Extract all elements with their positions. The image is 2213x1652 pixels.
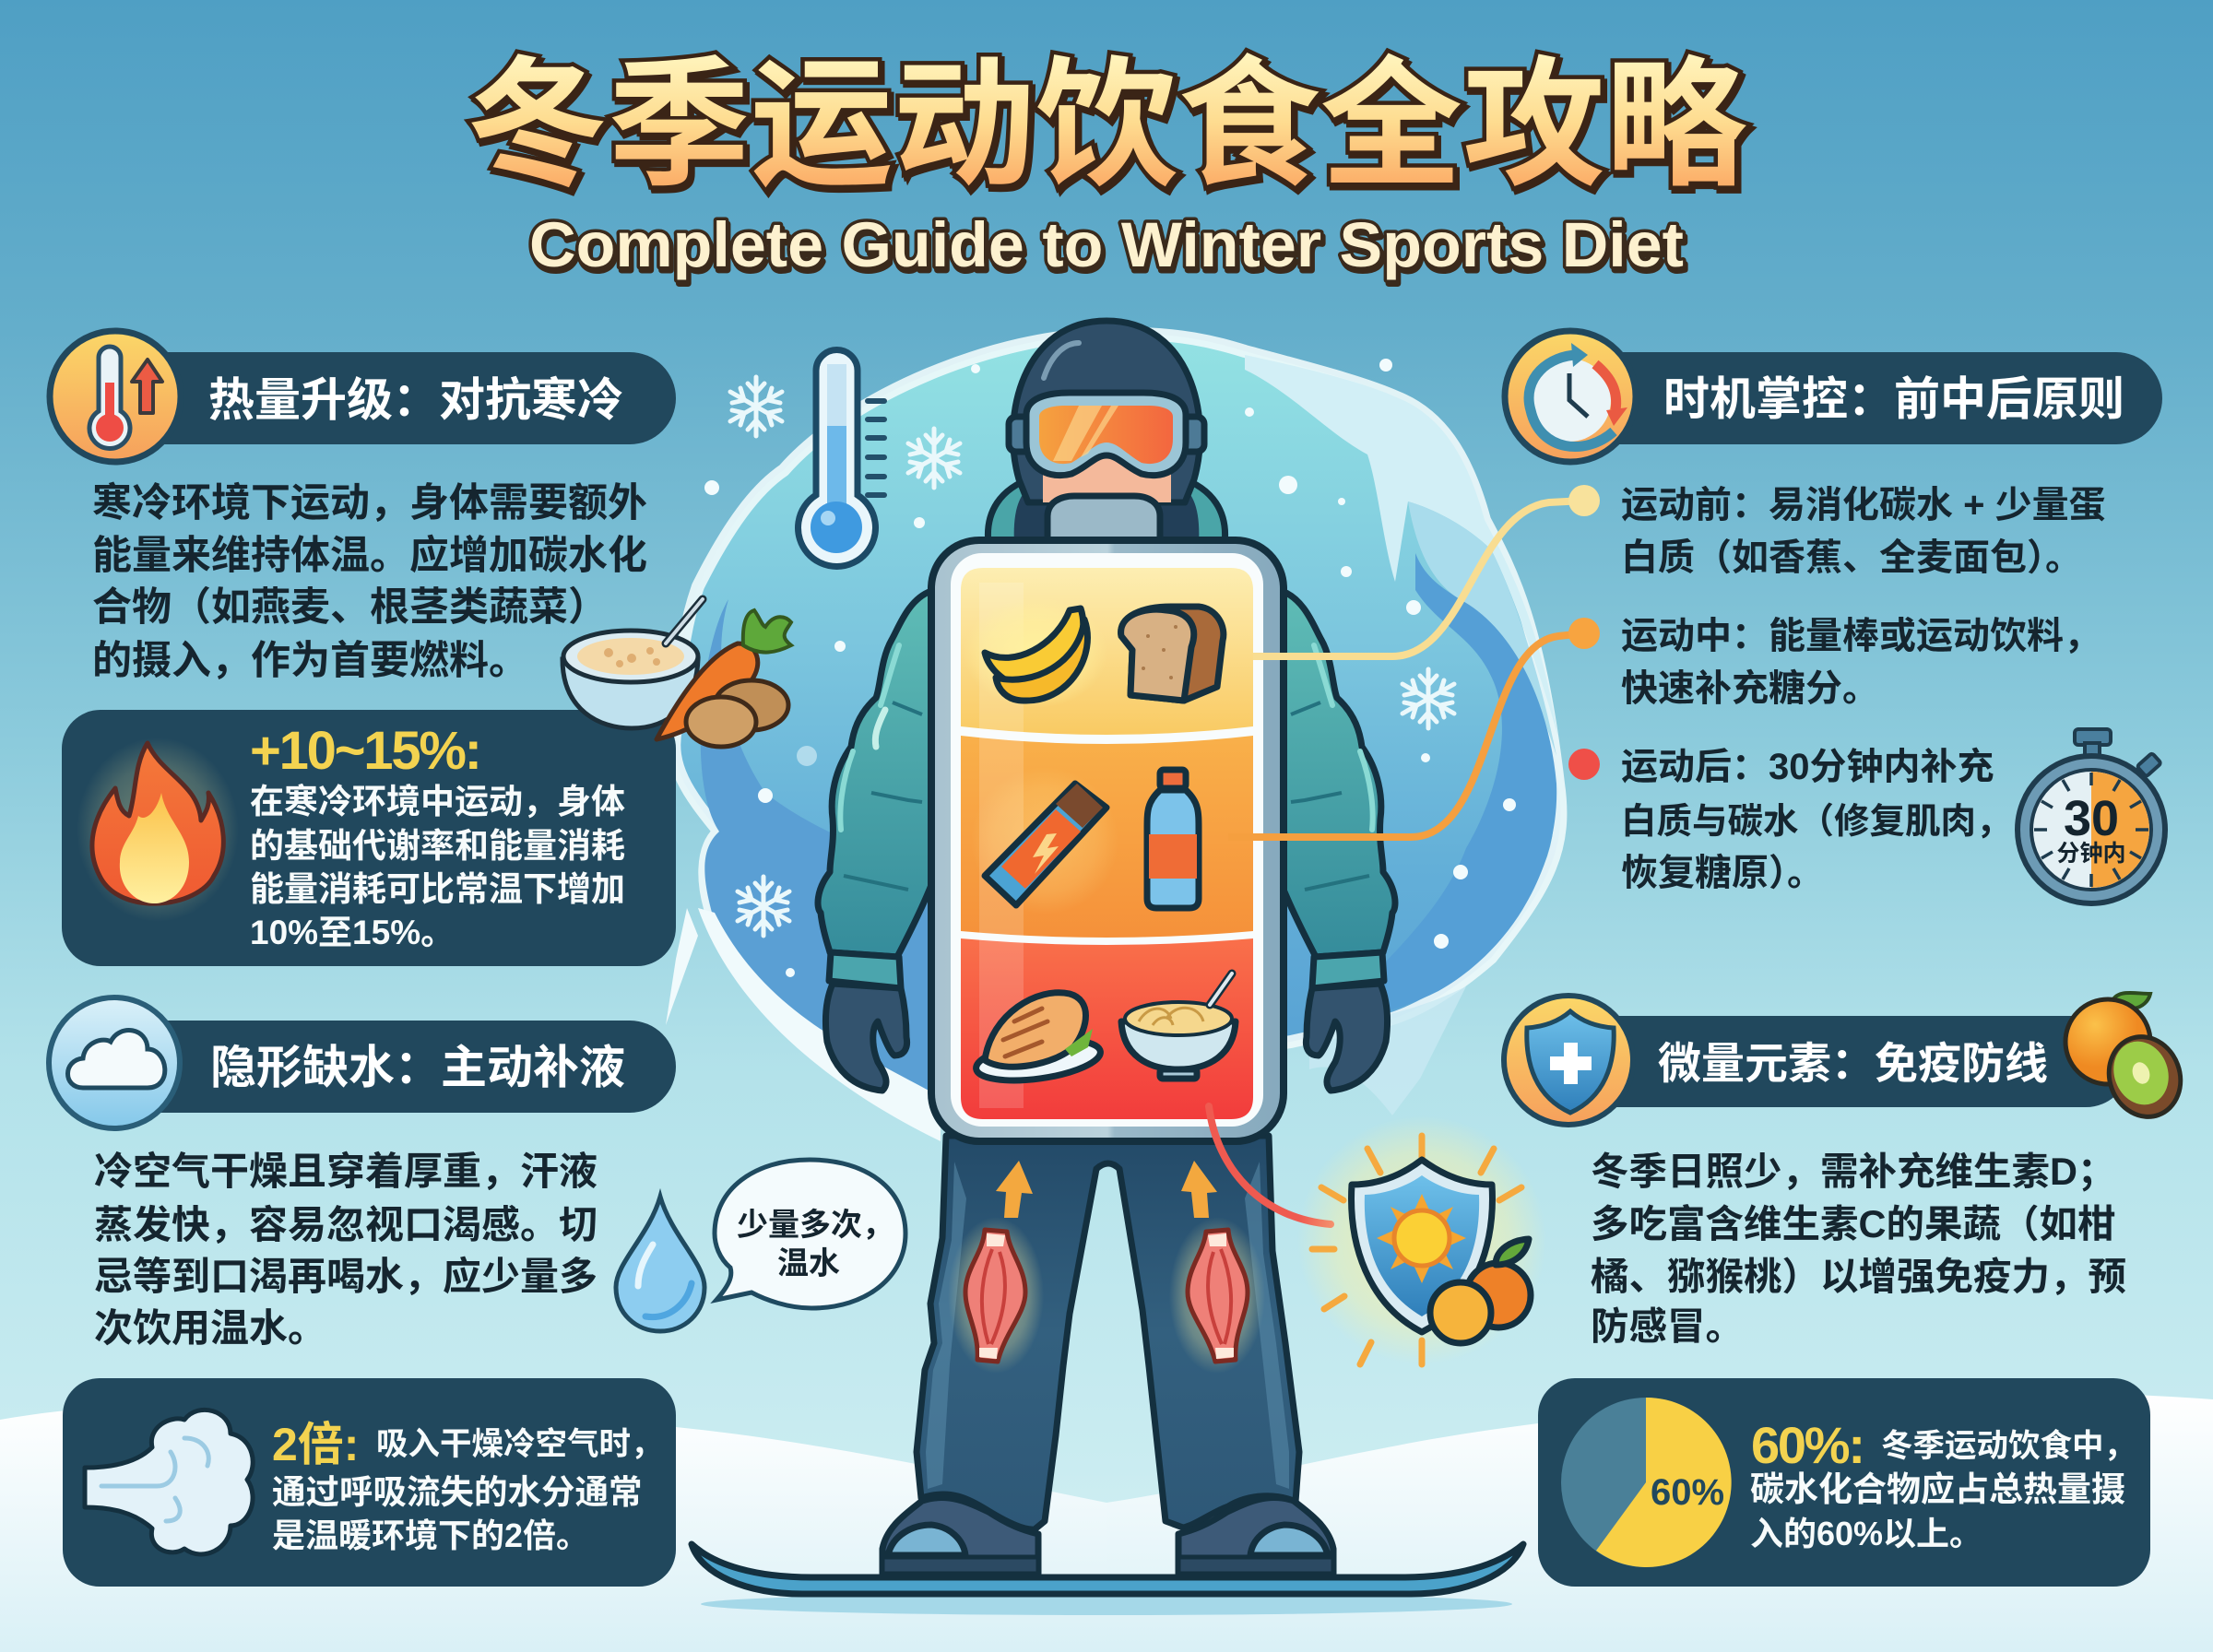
food: sports drink <box>1147 770 1199 908</box>
stat text <box>250 783 625 951</box>
panel: micronutrients <box>1504 993 2192 1587</box>
pie chart 60% <box>1561 1398 1732 1567</box>
body text: 橘、猕猴桃）以增强免疫力，预 <box>1591 1255 2126 1298</box>
left boot <box>882 1498 1038 1574</box>
icon: 30-minute stopwatch: 分钟内 <box>2056 841 2126 867</box>
stat number: 2倍: <box>272 1419 359 1470</box>
vitamin D shield <box>1297 1115 1546 1364</box>
icon: orange and kiwi <box>2065 993 2192 1127</box>
helmet highlight <box>1044 343 1079 378</box>
header pill <box>115 352 676 444</box>
icon: water drop <box>616 1197 704 1331</box>
connector: during-workout line <box>1228 633 1584 837</box>
icon: clock with arrows <box>1505 331 1636 462</box>
neck cap <box>1047 496 1160 546</box>
skier figure <box>692 321 1523 1615</box>
icon: medical shield <box>1504 996 1633 1125</box>
stat box <box>63 1378 676 1587</box>
stat text <box>1750 1429 2136 1552</box>
battery body <box>931 540 1284 1141</box>
pale blue ice below rim <box>1408 502 1556 756</box>
stat text: 是温暖环境下的2倍。 <box>272 1516 589 1554</box>
body text <box>94 1150 598 1350</box>
jacket collar <box>988 478 1225 544</box>
snowboard shadow <box>701 1593 1512 1615</box>
connector: pre-workout line <box>1253 501 1584 656</box>
stat number: 60%: <box>1751 1416 1865 1474</box>
body text: 防感冒。 <box>1591 1304 1744 1348</box>
text: after workout: 白质与碳水（修复肌肉， <box>1621 802 2012 842</box>
right muscle <box>1169 1217 1265 1374</box>
floating snow dots <box>704 359 1516 977</box>
body text: 合物（如燕麦、根茎类蔬菜） <box>92 585 608 630</box>
right arm <box>1282 591 1395 957</box>
icon: 30-minute stopwatch <box>2018 729 2165 903</box>
dot: pre-workout <box>1568 485 1600 516</box>
right up arrow <box>1181 1161 1217 1218</box>
right glove <box>1306 984 1388 1091</box>
ice rim upper right <box>1245 355 1558 738</box>
ice globe backdrop <box>666 334 1560 1141</box>
ice lower right <box>1309 986 1466 1115</box>
food: bread <box>1121 607 1224 701</box>
helmet <box>1013 321 1200 502</box>
stat text: 能量消耗可比常温下增加 <box>250 870 625 908</box>
snowboard <box>692 1544 1523 1594</box>
left muscle <box>948 1217 1044 1374</box>
icon: breath cloud <box>85 1410 253 1554</box>
text: during workout: 运动中：能量棒或运动饮料， <box>1621 616 2101 656</box>
icon: cloud <box>49 997 180 1128</box>
body text: 冬季日照少，需补充维生素D； <box>1591 1150 2115 1193</box>
stat text: 入的60%以上。 <box>1750 1515 1982 1552</box>
body text: 蒸发快，容易忽视口渴感。切 <box>94 1203 598 1246</box>
speech bubble: 温水 <box>777 1246 840 1281</box>
header pill <box>114 1021 676 1113</box>
dot: during workout <box>1568 618 1600 649</box>
body text <box>1591 1150 2126 1348</box>
right cuff <box>1312 952 1384 988</box>
title <box>466 47 1747 280</box>
stat text: 碳水化合物应占总热量摄 <box>1750 1470 2125 1508</box>
darker blue crescent right <box>1328 553 1556 1023</box>
left up arrow <box>996 1161 1033 1218</box>
speech bubble: 少量多次， <box>737 1208 893 1243</box>
stat text: 通过呼吸流失的水分通常 <box>272 1473 642 1511</box>
snowflakes <box>730 377 1454 936</box>
icon: oats, carrot and potatoes <box>562 599 791 747</box>
text: during workout <box>1621 616 2101 709</box>
food: noodle bowl <box>1121 974 1236 1079</box>
food: energy bar <box>971 767 1118 914</box>
stat box <box>1538 1378 2150 1587</box>
body text: 冷空气干燥且穿着厚重，汗液 <box>94 1150 598 1193</box>
panel: calories <box>50 331 676 966</box>
heading: 微量元素：免疫防线 <box>1658 1039 2048 1088</box>
left icicle <box>666 908 698 1025</box>
stat number: +10~15%: <box>250 721 482 781</box>
speech bubble <box>715 1160 905 1308</box>
body text: 多吃富含维生素C的果蔬（如柑 <box>1591 1202 2115 1245</box>
stat text <box>272 1427 662 1554</box>
header pill <box>1568 1016 2130 1107</box>
stat text: 的基础代谢率和能量消耗 <box>250 827 625 865</box>
text: pre-workout: 白质（如香蕉、全麦面包）。 <box>1621 537 2082 578</box>
food: banana <box>964 597 1107 708</box>
text: after workout <box>1621 747 2012 893</box>
right boot <box>1178 1498 1333 1574</box>
body text: 忌等到口渴再喝水，应少量多 <box>94 1255 598 1298</box>
header pill <box>1570 352 2162 444</box>
left glove <box>825 984 907 1091</box>
cold thermometer <box>798 350 884 566</box>
white ice band lower left <box>698 908 941 1141</box>
stat text: 10%至15%。 <box>250 914 455 951</box>
inner neck <box>1014 484 1199 544</box>
battery gloss <box>979 583 1024 1108</box>
panel: hydration <box>49 997 905 1587</box>
stat box <box>62 710 676 966</box>
battery casing <box>931 540 1284 1141</box>
body text: 次饮用温水。 <box>94 1306 326 1350</box>
segment: during workout <box>961 736 1253 938</box>
battery inner frame <box>951 553 1263 1127</box>
food: grilled chicken <box>974 993 1103 1087</box>
goggles <box>1009 393 1204 476</box>
text: after workout: 运动后：30分钟内补充 <box>1621 747 1994 787</box>
legs <box>917 1136 1299 1529</box>
left cuff <box>829 952 901 988</box>
text: after workout: 恢复糖原）。 <box>1621 853 1824 893</box>
dot: after workout <box>1568 749 1600 780</box>
pie chart 60%: 60% <box>1651 1472 1724 1513</box>
panel: timing <box>1505 331 2165 903</box>
segment: post-workout <box>961 938 1253 1119</box>
stat text: 吸入干燥冷空气时， <box>376 1427 662 1462</box>
icon: flame <box>77 738 239 922</box>
icon: 30-minute stopwatch: 30 <box>2064 791 2119 846</box>
connector: red line to vitamin shield <box>1209 1106 1331 1224</box>
main Chinese title: 冬季运动饮食全攻略 <box>466 47 1747 204</box>
trouser highlight left <box>926 1162 966 1489</box>
heading: 热量升级：对抗寒冷 <box>208 374 623 426</box>
body text: 能量来维持体温。应增加碳水化 <box>92 534 647 578</box>
left arm <box>818 591 931 957</box>
text: pre-workout: 运动前：易消化碳水 + 少量蛋 <box>1621 485 2106 525</box>
globe body <box>674 334 1560 1097</box>
heading: 隐形缺水：主动补液 <box>210 1042 625 1093</box>
icon: thermometer and arrow <box>50 331 181 462</box>
stat text: 在寒冷环境中运动，身体 <box>250 783 625 820</box>
stat text: 冬季运动饮食中， <box>1881 1429 2136 1464</box>
heading: 时机掌控：前中后原则 <box>1663 373 2124 425</box>
body text <box>92 481 647 683</box>
text: during workout: 快速补充糖分。 <box>1621 668 1879 709</box>
body text: 的摄入，作为首要燃料。 <box>92 639 528 683</box>
segment: pre-workout <box>961 568 1253 735</box>
darker blue band left <box>701 599 931 1097</box>
English subtitle: Complete Guide to Winter Sports Diet <box>529 209 1684 280</box>
face <box>1043 452 1171 502</box>
snow hills <box>0 1393 2213 1652</box>
text: pre-workout <box>1621 485 2106 578</box>
body text: 寒冷环境下运动，身体需要额外 <box>92 481 647 525</box>
trouser highlight right <box>1245 1162 1289 1489</box>
